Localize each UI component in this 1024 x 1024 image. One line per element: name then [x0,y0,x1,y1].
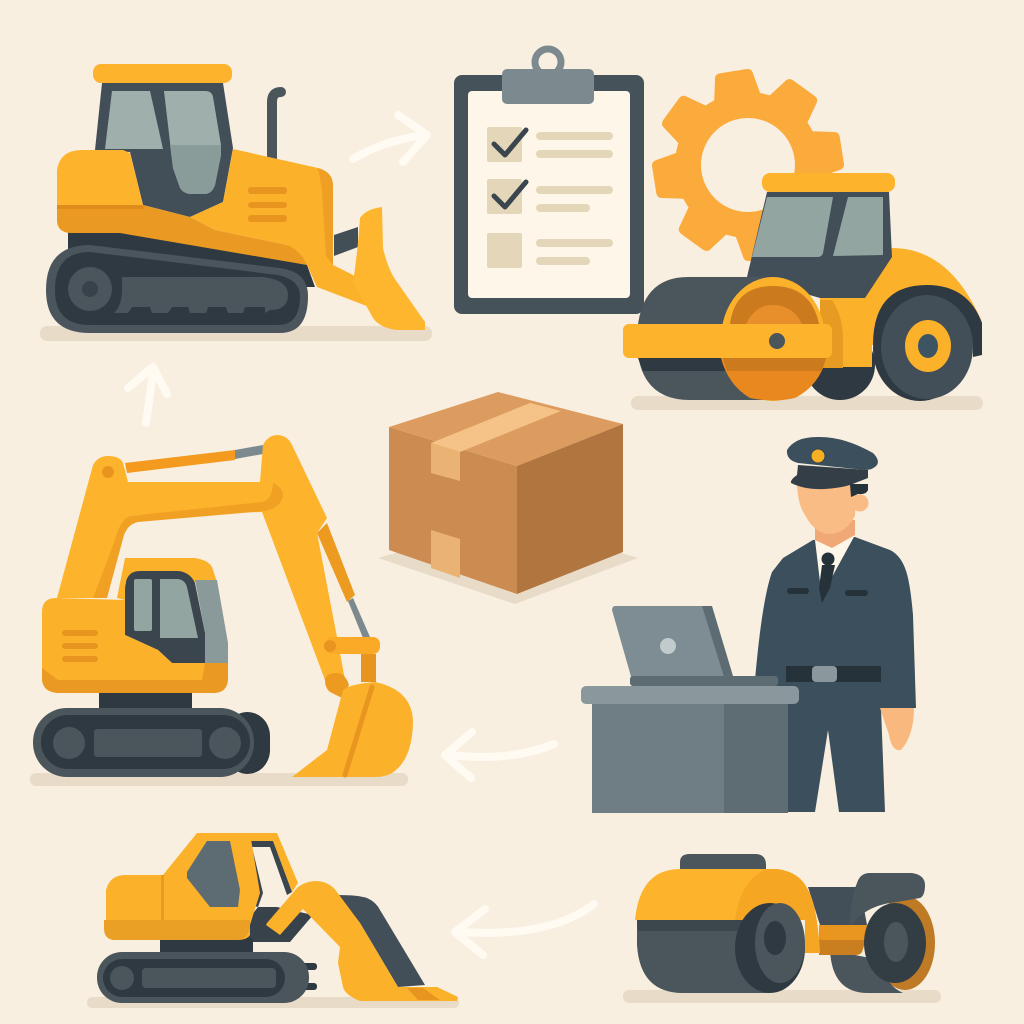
officer head and cap [787,437,878,534]
icon: gear [650,67,846,263]
desk [581,686,799,813]
icon: excavator [30,435,413,786]
icon: road roller top right [623,173,983,410]
arrow: bulldozer to checklist [353,115,427,162]
arrow: small roller to loader [455,904,594,955]
icon: clipboard checklist [454,49,644,314]
laptop [612,606,778,686]
arrow: excavator to bulldozer [128,367,167,423]
arrow: desk to excavator [445,732,554,778]
icon: cardboard box [378,392,638,604]
icon: wheel loader on tracks [87,833,459,1008]
icon: bulldozer [40,64,432,341]
icon: inspector at desk with laptop [581,437,916,813]
officer body [755,520,916,812]
icon: small road roller bottom right [623,854,941,1003]
